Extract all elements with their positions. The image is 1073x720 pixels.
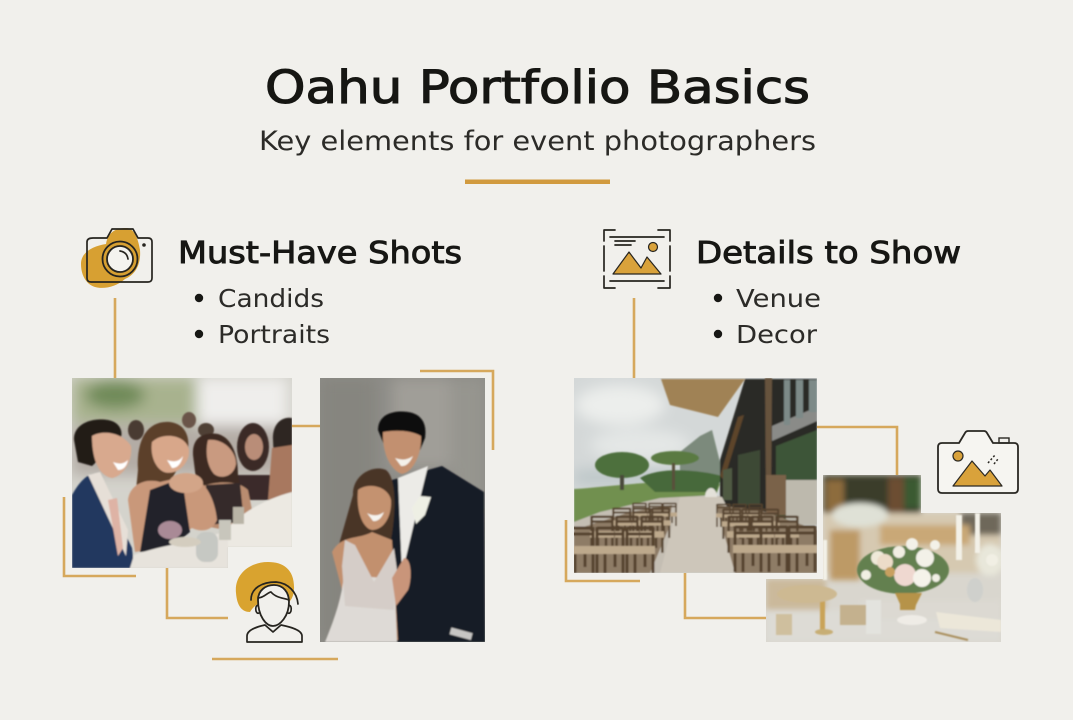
list: must-have shots: Candids [218, 284, 324, 313]
heading: details to show: Details to Show [696, 236, 961, 271]
table [130, 530, 228, 568]
back woman second [192, 432, 240, 486]
chair block shadows [574, 505, 672, 573]
mountain [680, 430, 722, 480]
icon: camera with landscape [938, 431, 1018, 493]
ground and plants [574, 496, 735, 573]
list: details to show: Venue [736, 284, 821, 313]
subtitle: Key elements for event photographers [259, 126, 816, 157]
title: Oahu Portfolio Basics [265, 61, 810, 114]
heading: must-have shots: Must-Have Shots [178, 236, 462, 271]
photo: candid guests at a table [72, 378, 292, 568]
icon: person with gold blob [236, 562, 302, 642]
aisle floor [662, 496, 732, 572]
icon: camera with gold blob [81, 228, 152, 288]
list: details to show: Decor [736, 320, 818, 349]
chairs: left block [632, 503, 647, 526]
woman laughing [136, 420, 190, 486]
photo: reception table setting [766, 475, 1004, 642]
list: must-have shots: Portraits [218, 320, 330, 349]
building [720, 379, 817, 520]
title underline [465, 180, 610, 184]
photo: outdoor venue with chairs [565, 378, 817, 573]
foreground man [272, 416, 292, 448]
icon: framed landscape [604, 230, 670, 288]
trees [595, 452, 649, 478]
list: details to show [714, 284, 821, 349]
connector lines and brackets [64, 298, 897, 659]
man [74, 419, 122, 466]
photo: couple portrait [320, 378, 485, 642]
chairs: right block [716, 504, 731, 527]
list: must-have shots [195, 284, 330, 349]
bride [339, 468, 396, 544]
